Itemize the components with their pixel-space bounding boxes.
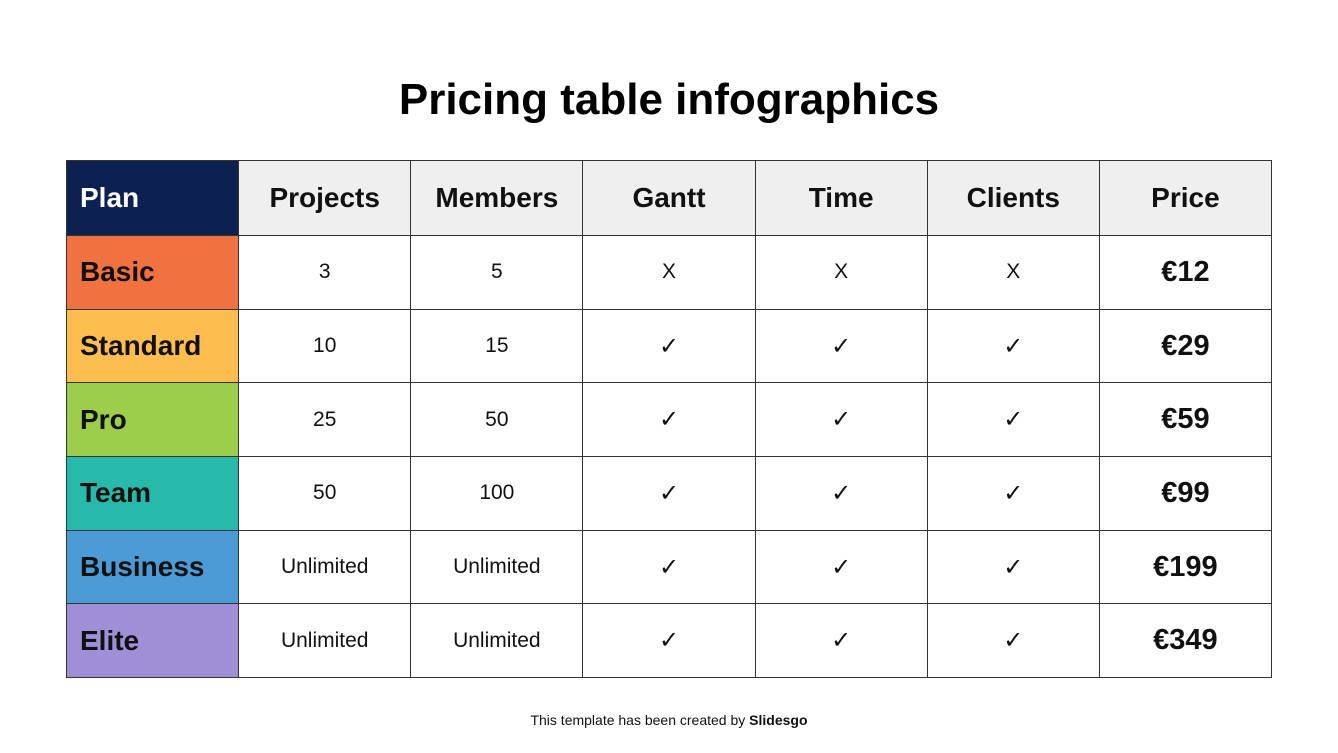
pricing table: Team bbox=[80, 477, 151, 508]
pricing table: ✓ bbox=[831, 554, 851, 581]
pricing table: ✓ bbox=[831, 480, 851, 507]
pricing table: Gantt bbox=[632, 182, 706, 213]
pricing table: Unlimited bbox=[453, 555, 541, 578]
pricing table: ✓ bbox=[1003, 333, 1023, 360]
pricing table: ✓ bbox=[659, 627, 679, 654]
pricing table: 50 bbox=[313, 481, 336, 504]
pricing table: ✓ bbox=[1003, 406, 1023, 433]
pricing table: 50 bbox=[485, 408, 509, 431]
pricing table: X bbox=[1006, 260, 1020, 283]
pricing table bbox=[66, 160, 1272, 678]
pricing table: ✓ bbox=[1003, 480, 1023, 507]
pricing table: ✓ bbox=[659, 406, 679, 433]
pricing table: €349 bbox=[1153, 624, 1218, 656]
pricing table: 5 bbox=[491, 260, 503, 283]
pricing table: Members bbox=[435, 182, 558, 213]
pricing table: ✓ bbox=[659, 554, 679, 581]
pricing table: €59 bbox=[1161, 403, 1210, 435]
pricing table: Plan bbox=[80, 182, 139, 213]
pricing table: ✓ bbox=[831, 333, 851, 360]
pricing table: €29 bbox=[1161, 330, 1210, 362]
pricing table: 10 bbox=[313, 334, 336, 357]
pricing table: Unlimited bbox=[281, 629, 368, 652]
pricing table: Time bbox=[809, 182, 874, 213]
pricing table: Basic bbox=[80, 256, 155, 287]
pricing table: Business bbox=[80, 551, 204, 582]
pricing table: Elite bbox=[80, 625, 139, 656]
pricing table: ✓ bbox=[831, 406, 851, 433]
pricing table: Unlimited bbox=[281, 555, 368, 578]
pricing table: ✓ bbox=[659, 480, 679, 507]
pricing table: X bbox=[834, 260, 848, 283]
pricing table: €12 bbox=[1161, 256, 1210, 288]
pricing table: Clients bbox=[967, 182, 1060, 213]
pricing table: 3 bbox=[319, 260, 331, 283]
pricing table: €99 bbox=[1161, 477, 1210, 509]
pricing table: ✓ bbox=[1003, 627, 1023, 654]
pricing table: ✓ bbox=[1003, 554, 1023, 581]
pricing table: X bbox=[662, 260, 676, 283]
pricing table: Standard bbox=[80, 330, 201, 361]
pricing table: ✓ bbox=[831, 627, 851, 654]
footer credit: This template has been created by Slidesgo bbox=[530, 712, 808, 728]
pricing table: ✓ bbox=[659, 333, 679, 360]
pricing table: Price bbox=[1151, 182, 1220, 213]
pricing table: €199 bbox=[1153, 551, 1218, 583]
pricing table: 25 bbox=[313, 408, 336, 431]
pricing table: Projects bbox=[269, 182, 380, 213]
pricing table: Pro bbox=[80, 404, 127, 435]
pricing table: 100 bbox=[479, 481, 514, 504]
pricing table: Unlimited bbox=[453, 629, 541, 652]
pricing table: 15 bbox=[485, 334, 509, 357]
title: Pricing table infographics bbox=[399, 75, 939, 124]
